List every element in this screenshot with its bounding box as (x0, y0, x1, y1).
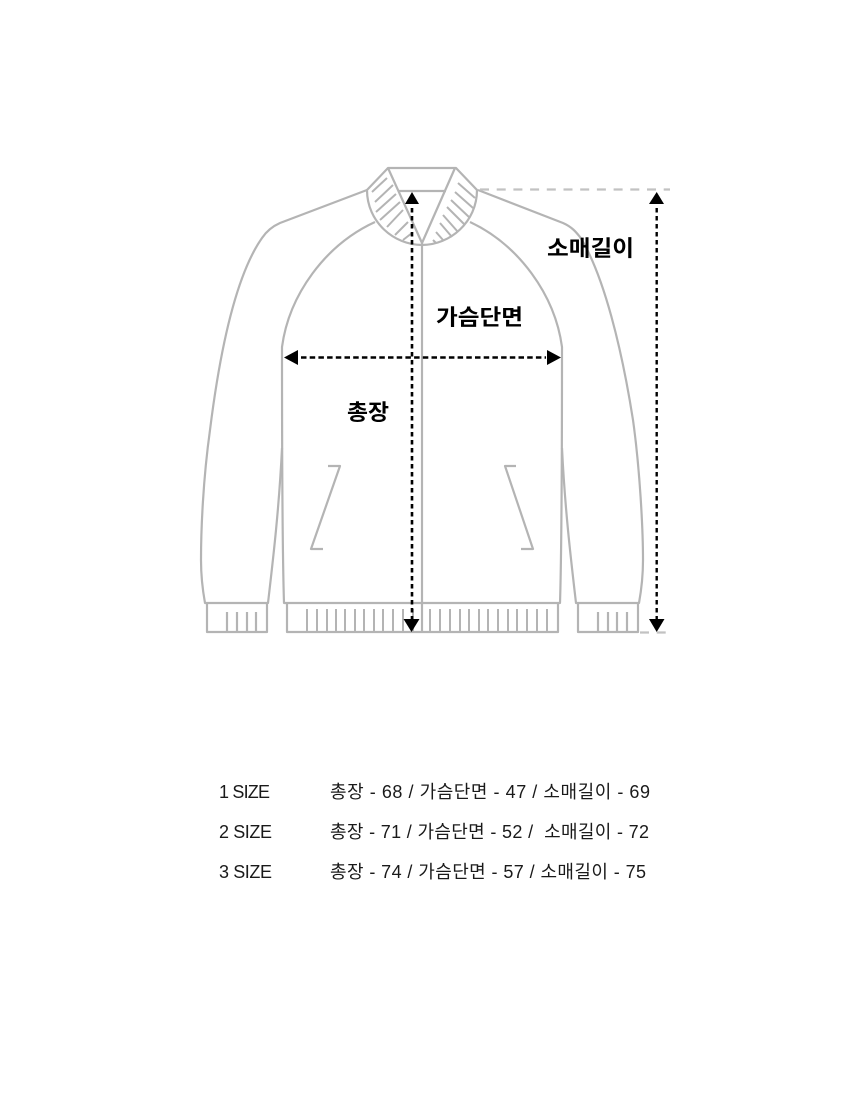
label: sleeve length: 소매길이 (547, 236, 634, 261)
collar hatching (372, 178, 475, 243)
jacket body (282, 222, 562, 603)
size table (219, 782, 650, 882)
label: total length: 총장 (347, 400, 389, 425)
left cuff (207, 603, 267, 632)
bottom hem (287, 603, 558, 632)
center zipper (421, 243, 423, 632)
row: size 2: 총장 - 71 / 가슴단면 - 52 / 소매길이 - 72 (330, 822, 649, 842)
arrow: total length (404, 192, 420, 632)
row: size 3: 3 SIZE (219, 862, 272, 882)
right cuff (578, 603, 638, 632)
hem ribs (307, 609, 547, 632)
right pocket (505, 466, 533, 549)
right sleeve (478, 190, 643, 603)
jacket outline drawing (201, 168, 643, 632)
row: size 1: 1 SIZE (219, 782, 270, 802)
arrow: sleeve length (649, 192, 664, 632)
arrow: chest width (284, 350, 561, 365)
row: size 3: 총장 - 74 / 가슴단면 - 57 / 소매길이 - 75 (330, 862, 646, 882)
guide lines: sleeve length (480, 190, 670, 632)
row: size 1: 총장 - 68 / 가슴단면 - 47 / 소매길이 - 69 (330, 782, 650, 802)
left pocket (311, 466, 340, 549)
row: size 2: 2 SIZE (219, 822, 272, 842)
left sleeve (201, 190, 367, 603)
label: chest width: 가슴단면 (436, 305, 523, 330)
collar (367, 168, 477, 245)
